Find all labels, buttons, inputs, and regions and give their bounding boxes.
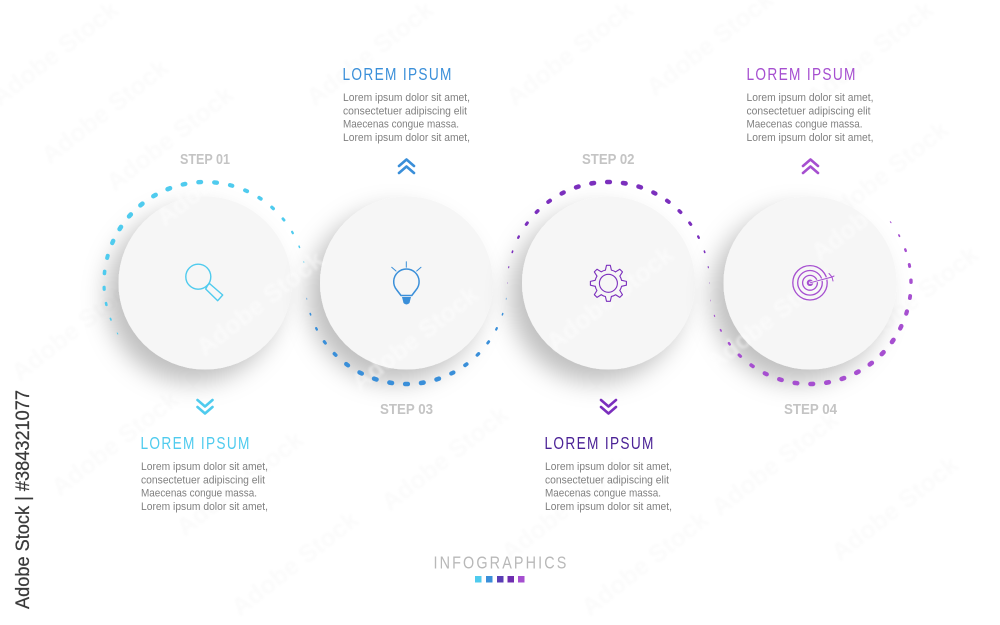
step label 03: STEP 03 bbox=[380, 402, 433, 418]
watermark: background: Adobe Stock bbox=[101, 81, 239, 197]
text block 1: Lorem ipsum dolor sit amet, bbox=[141, 461, 268, 473]
step label 01: STEP 01 bbox=[180, 152, 230, 168]
heading 2: LOREM IPSUM bbox=[342, 65, 453, 85]
watermark: background: Adobe Stock bbox=[816, 116, 954, 232]
text block 4: Lorem ipsum dolor sit amet, bbox=[746, 92, 874, 104]
text block 4 bbox=[746, 65, 874, 144]
footer colour squares bbox=[475, 576, 524, 582]
watermark: background: Adobe Stock bbox=[36, 54, 174, 170]
footer title: INFOGRAPHICS bbox=[434, 553, 569, 573]
text block 1: Lorem ipsum dolor sit amet, bbox=[141, 501, 268, 513]
heading 4: LOREM IPSUM bbox=[746, 65, 857, 85]
circle 3 bbox=[522, 196, 695, 370]
text block 3: Maecenas congue massa. bbox=[545, 488, 661, 500]
watermark: background: Adobe Stock bbox=[171, 426, 309, 542]
chevrons: up 2 bbox=[399, 160, 414, 173]
text block 4: consectetuer adipiscing elit bbox=[746, 105, 870, 117]
chevrons: down 3 bbox=[601, 400, 616, 414]
circle 4 bbox=[724, 196, 896, 370]
watermark: over circles: Adobe Stock bbox=[701, 261, 839, 377]
icon: magnifier bbox=[186, 264, 223, 301]
text block 2: Lorem ipsum dolor sit amet, bbox=[343, 132, 470, 144]
watermark: over circles: Adobe Stock bbox=[191, 246, 329, 362]
watermark: over circles: Adobe Stock bbox=[151, 116, 289, 232]
step label 02: STEP 02 bbox=[582, 152, 634, 168]
text block 3: Lorem ipsum dolor sit amet, bbox=[545, 461, 672, 473]
dashed ring 1 bbox=[104, 182, 304, 334]
icon: light bulb bbox=[392, 262, 421, 304]
watermark: background: Adobe Stock bbox=[46, 386, 184, 502]
watermark: over circles: Adobe Stock bbox=[806, 151, 944, 267]
dashed ring 4 bbox=[710, 222, 911, 384]
text block 1: consectetuer adipiscing elit bbox=[141, 474, 265, 486]
text block 2 bbox=[342, 65, 470, 144]
chevrons: down 1 bbox=[198, 400, 212, 414]
watermark: over circles: Adobe Stock bbox=[541, 241, 679, 357]
icon: target bbox=[793, 266, 834, 300]
watermark: over circles bbox=[151, 116, 944, 397]
chevrons: up 4 bbox=[803, 160, 818, 173]
icon: gear bbox=[590, 265, 626, 301]
text block 1: Maecenas congue massa. bbox=[141, 488, 257, 500]
text block 4: Maecenas congue massa. bbox=[746, 119, 862, 131]
text block 2: Maecenas congue massa. bbox=[343, 119, 459, 131]
step label 04: STEP 04 bbox=[784, 402, 837, 418]
heading 1: LOREM IPSUM bbox=[140, 434, 251, 454]
watermark: background: Adobe Stock bbox=[706, 406, 844, 522]
watermark: background: Adobe Stock bbox=[826, 451, 964, 567]
text block 2: consectetuer adipiscing elit bbox=[343, 105, 467, 117]
circle 2 bbox=[320, 196, 493, 370]
watermark: over circles: Adobe Stock bbox=[346, 281, 484, 397]
watermark: background: Adobe Stock bbox=[226, 506, 364, 622]
text block 3 bbox=[544, 434, 672, 513]
side credit: Adobe Stock | #384321077 bbox=[13, 390, 34, 609]
text block 4: Lorem ipsum dolor sit amet, bbox=[746, 132, 874, 144]
heading 3: LOREM IPSUM bbox=[544, 434, 655, 454]
watermark: background: Adobe Stock bbox=[6, 271, 144, 387]
dashed ring 2 bbox=[307, 298, 506, 384]
dashed ring 3 bbox=[508, 182, 710, 284]
text block 3: Lorem ipsum dolor sit amet, bbox=[545, 501, 672, 513]
watermark: background: Adobe Stock bbox=[576, 506, 714, 622]
watermark: background: Adobe Stock bbox=[496, 451, 634, 567]
watermark: background: Adobe Stock bbox=[846, 241, 984, 357]
circle 1 bbox=[118, 196, 292, 370]
text block 1 bbox=[140, 434, 268, 513]
watermark: background: Adobe Stock bbox=[376, 401, 514, 517]
text block 2: Lorem ipsum dolor sit amet, bbox=[343, 92, 470, 104]
text block 3: consectetuer adipiscing elit bbox=[545, 474, 669, 486]
